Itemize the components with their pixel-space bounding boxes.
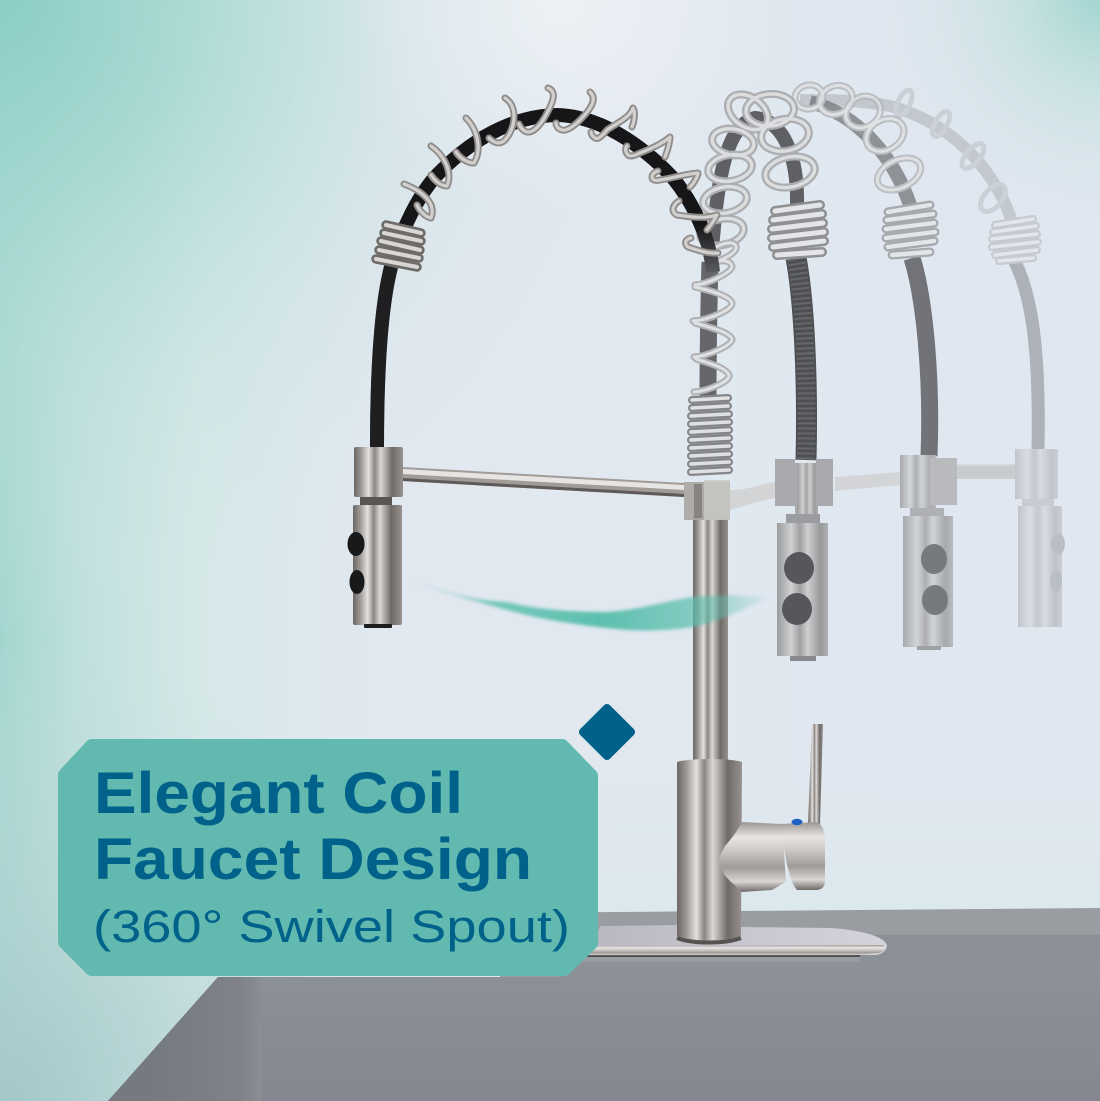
spray head body bbox=[353, 505, 402, 625]
decorative diamond bbox=[577, 702, 637, 762]
heading line two: Faucet Design bbox=[94, 827, 532, 892]
spray button bottom bbox=[350, 570, 364, 594]
horizontal bar bbox=[402, 467, 684, 497]
subheading: (360° Swivel Spout) bbox=[93, 901, 570, 952]
deck plate bbox=[585, 925, 887, 957]
heading line one: Elegant Coil bbox=[94, 761, 463, 826]
pivot rib coil bbox=[691, 398, 729, 472]
handle barrel bbox=[718, 822, 786, 892]
pivot hose fading bbox=[708, 262, 710, 398]
sink and counter bbox=[108, 908, 1100, 1101]
rib coil block bbox=[376, 225, 421, 267]
ghost faucet far right bbox=[800, 88, 1065, 627]
spray head collar bbox=[354, 447, 403, 497]
stem bbox=[693, 515, 728, 761]
main braided hose bbox=[377, 115, 713, 447]
ghost faucet second bbox=[698, 87, 833, 661]
arch coil loops bbox=[404, 88, 718, 253]
lever stick bbox=[808, 724, 823, 824]
swivel swoosh bbox=[407, 580, 772, 630]
blue indicator bbox=[792, 819, 802, 825]
callout panel bbox=[58, 739, 598, 976]
spray button top bbox=[348, 532, 364, 556]
pivot collar bbox=[684, 480, 730, 520]
spray head neck bbox=[360, 497, 392, 506]
callout label bbox=[58, 739, 598, 976]
ghost faucet third bbox=[793, 80, 1017, 650]
main faucet bbox=[348, 88, 887, 957]
pivot spring bbox=[693, 243, 736, 392]
spray nozzle bbox=[364, 624, 392, 628]
base cylinder bbox=[677, 759, 742, 940]
handle cap bbox=[781, 822, 825, 890]
hose lower section bbox=[377, 267, 391, 447]
